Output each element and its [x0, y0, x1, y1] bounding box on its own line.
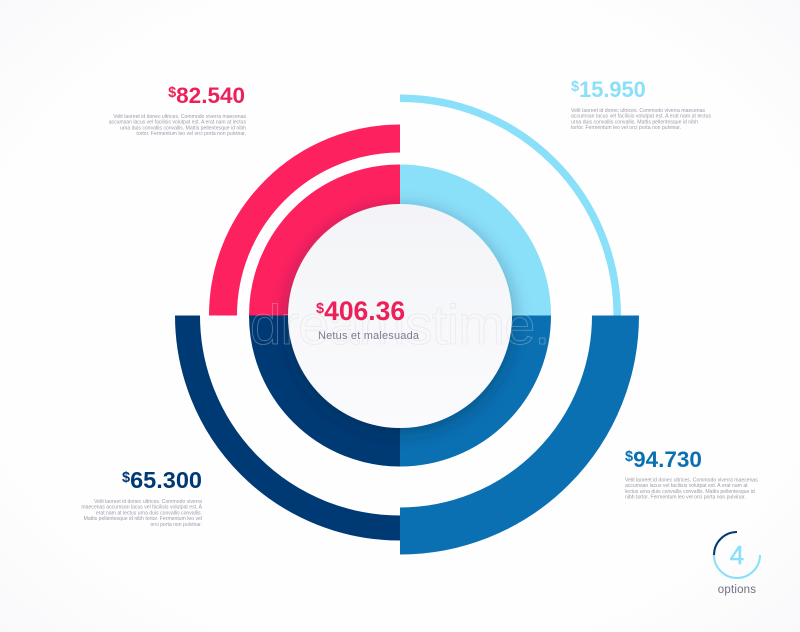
description — [571, 108, 711, 131]
outer arc: navy — [188, 316, 400, 528]
description: tortor. Fermentum leo vel orci porta non pulvinar. — [571, 125, 681, 131]
inner ring: red quadrant — [269, 184, 400, 316]
chart: concentric quadrant rings — [188, 98, 617, 531]
watermark: dreamstime. — [250, 293, 550, 356]
badge arc: navy — [714, 532, 737, 555]
block: 65.300 — [81, 467, 203, 528]
description: accumsan lacus vel facilisis volutpat est. A erat nam at lectus — [571, 114, 711, 120]
description: lectus urna duis convallis convallis. Mattis pellentesque id — [625, 489, 755, 495]
block: 15.950 — [571, 77, 711, 131]
description: Velit laoreet id donec ultrices. Commodo viverra — [94, 499, 202, 505]
description: urna duis convallis convallis. Mattis pellentesque id nibh — [120, 125, 246, 131]
inner ring: blue quadrant — [400, 316, 531, 446]
block: 82.540 — [109, 83, 246, 137]
badge label: options — [718, 584, 756, 596]
badge number: 4 — [730, 540, 744, 570]
description: orci porta non pulvinar. — [150, 522, 202, 528]
description: tortor. Fermentum leo vel orci porta non pulvinar. — [136, 131, 246, 137]
badge arc: light — [714, 555, 760, 578]
value: 15.950 — [579, 77, 646, 102]
description — [109, 114, 246, 137]
description: Velit laoreet id donec ultrices. Commodo viverra maecenas — [113, 114, 246, 120]
inner ring: navy quadrant — [269, 316, 400, 446]
description: urna duis convallis convallis. Mattis pellentesque id nibh — [571, 119, 698, 125]
value: 65.300 — [130, 467, 202, 493]
description — [81, 499, 203, 528]
description — [625, 478, 758, 501]
description: Velit laoreet id donec ultrices. Commodo viverra maecenas — [625, 478, 758, 484]
value: $ — [168, 85, 176, 101]
description: Mattis pellentesque id nibh tortor. Fermentum leo vel — [84, 516, 202, 522]
center caption: Netus et malesuada — [318, 330, 420, 342]
outer arc: red — [223, 138, 400, 316]
outer arc: light blue — [400, 98, 617, 316]
description: erat nam at lectus urna duis convallis convallis. — [96, 510, 202, 516]
value: $ — [625, 449, 633, 465]
inner ring: light blue quadrant — [400, 184, 531, 316]
center total value: 406.36 — [324, 296, 405, 326]
options badge — [714, 532, 760, 596]
description: accumsan lacus vel facilisis volutpat est. A erat nam at lectus — [109, 120, 246, 126]
block: 94.730 — [625, 447, 758, 501]
description: accumsan lacus vel facilisis volutpat est. A erat nam at — [625, 483, 748, 489]
description: Velit laoreet id donec ultrices. Commodo viverra maecenas — [571, 108, 705, 114]
value: 94.730 — [633, 447, 702, 472]
value: $ — [571, 79, 579, 95]
value: 82.540 — [176, 83, 245, 108]
center total value: $ — [316, 301, 324, 317]
outer arc: blue — [400, 316, 616, 531]
center disc — [288, 204, 512, 428]
description: nibh tortor. Fermentum leo vel orci porta non pulvinar. — [625, 495, 746, 501]
description: maecenas accumsan lacus vel facilisis volutpat est. A — [81, 505, 203, 511]
value: $ — [122, 470, 130, 486]
